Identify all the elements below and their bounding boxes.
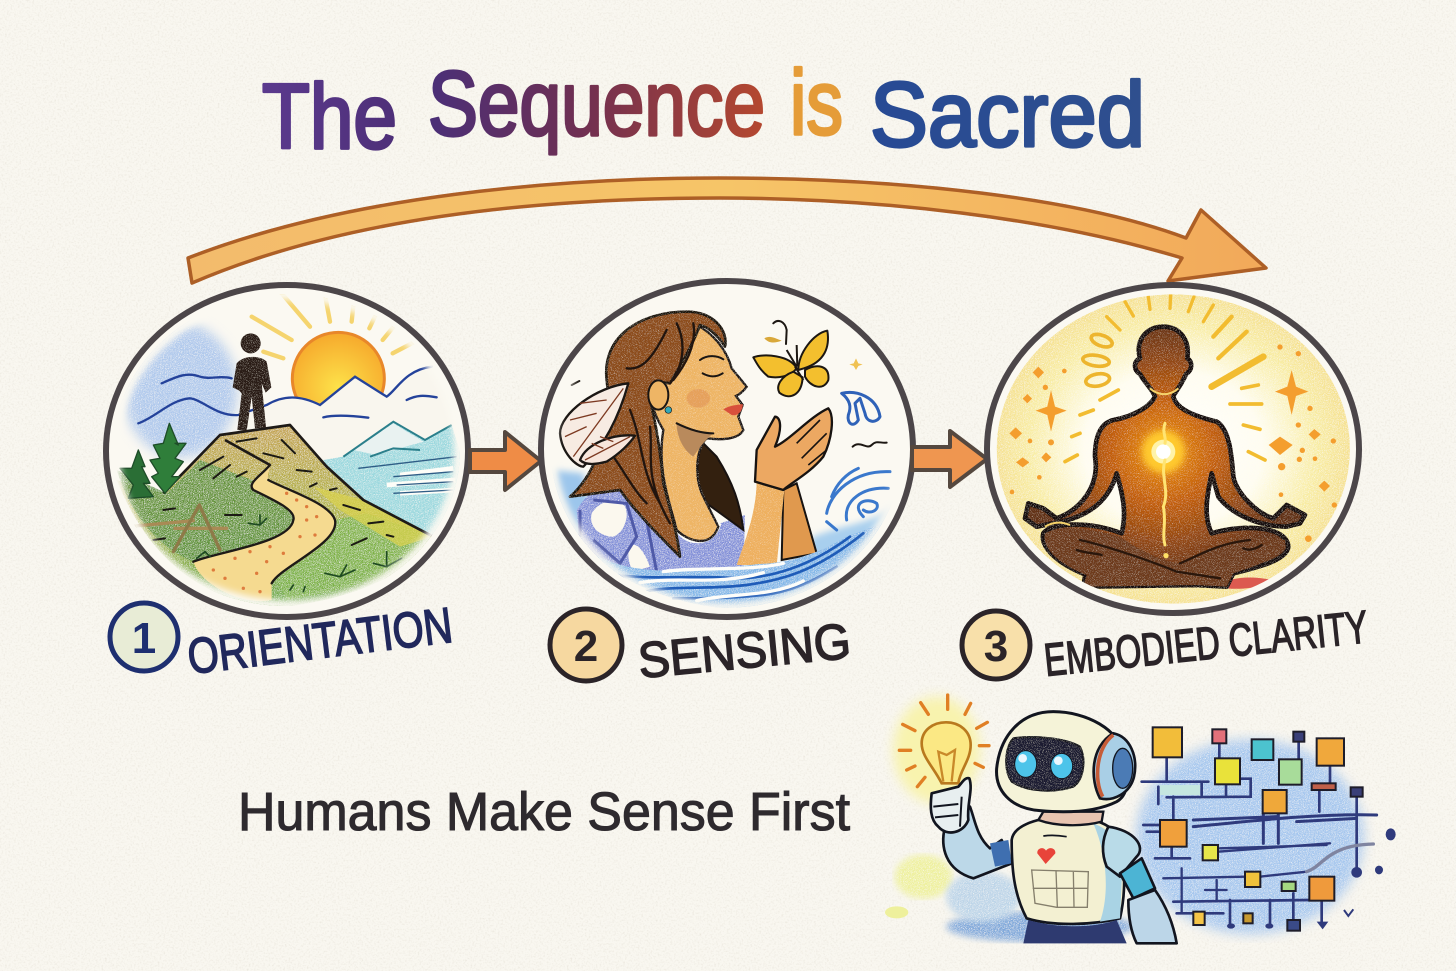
- hill: [117, 425, 433, 607]
- musical note: [842, 393, 880, 424]
- red mat shadow: [1227, 577, 1280, 589]
- title: is: [790, 52, 843, 154]
- back hair: [691, 443, 743, 530]
- badge 3: [962, 611, 1030, 679]
- neck and face: [651, 325, 747, 541]
- scene: mountain and sun: [113, 293, 463, 607]
- water behind: [552, 466, 588, 541]
- scene: meditating figure: [997, 293, 1350, 604]
- arrow: sequence overarching: [188, 178, 1266, 283]
- label: step 1 orientation: [110, 597, 455, 685]
- robot head: [997, 712, 1135, 812]
- cloud mask: [296, 378, 383, 426]
- light bulb: [899, 695, 989, 787]
- hill outline: [163, 425, 433, 537]
- neck line: [1150, 388, 1178, 394]
- panel: orientation illustration: [106, 285, 468, 617]
- trees: [120, 423, 186, 498]
- fence: [135, 505, 227, 552]
- panel: sensing illustration: [541, 281, 913, 617]
- arms: [782, 483, 817, 560]
- soft edge: [552, 316, 892, 608]
- arrow: step 2 to 3: [912, 431, 987, 487]
- scene: woman with butterfly in water: [550, 289, 903, 609]
- badge 1: 1: [132, 614, 156, 663]
- neck shade: [677, 423, 713, 457]
- hill marks: [153, 438, 393, 545]
- face details: [677, 356, 723, 433]
- butterfly: [753, 331, 828, 396]
- distant mountains and lake: [323, 422, 462, 537]
- robot arm raised: [943, 807, 1012, 878]
- front hair: [570, 312, 725, 557]
- panel: embodied clarity illustration: [987, 285, 1359, 613]
- network lines: [1142, 742, 1377, 925]
- title: The: [262, 66, 397, 168]
- seated body: [1025, 327, 1305, 587]
- accents: [572, 321, 887, 447]
- rings left: [1082, 332, 1114, 388]
- orientation text: ORIENTATION: [185, 597, 455, 685]
- sun: [290, 330, 386, 404]
- washes: [885, 697, 1363, 942]
- badge 3: 3: [984, 622, 1008, 671]
- network dots: [1227, 828, 1396, 929]
- crossed legs: [1045, 529, 1285, 587]
- hands: [755, 408, 832, 490]
- standing figure: [233, 333, 271, 431]
- arrow: step 1 to 2: [470, 432, 541, 490]
- water: [597, 524, 882, 608]
- illustration: robot with light bulb and network: [885, 695, 1396, 943]
- sparkles: [1009, 344, 1337, 542]
- soft edge: [113, 294, 460, 606]
- title: [262, 52, 1145, 168]
- sky wash: [123, 323, 237, 457]
- ear: [1094, 733, 1135, 799]
- sensing text: SENSING: [636, 613, 853, 689]
- title: Sacred: [870, 64, 1145, 166]
- circle outline 3: [987, 285, 1359, 613]
- shirt: [576, 492, 745, 572]
- circle outline 1: [106, 285, 468, 617]
- badge 2: [550, 609, 622, 681]
- clouds: [138, 367, 437, 423]
- hair strands: [613, 323, 694, 523]
- trail: [193, 465, 335, 601]
- badge 1: [110, 603, 178, 671]
- label: step 2 sensing: [550, 609, 853, 689]
- rays right: [1065, 293, 1265, 462]
- sun rays: [252, 293, 415, 358]
- label: step 3 embodied clarity: [962, 600, 1370, 686]
- robot torso: [1012, 817, 1124, 924]
- grass tufts: [197, 515, 402, 592]
- right arm: [1103, 827, 1177, 943]
- tagline: Humans Make Sense First: [238, 782, 850, 842]
- robot hips: [1023, 920, 1127, 943]
- ear and earring: [648, 380, 668, 410]
- robot neck: [1038, 812, 1103, 825]
- leaves: [560, 383, 635, 467]
- badge 2: 2: [574, 622, 598, 671]
- circle outline 2: [541, 281, 913, 617]
- glow wash: [997, 294, 1350, 604]
- robot hand: [931, 778, 971, 832]
- network nodes: [1153, 727, 1363, 931]
- chest panel and heart: [1032, 835, 1088, 907]
- eyes: [1015, 751, 1037, 777]
- heart glow: [1142, 430, 1185, 473]
- title: Sequence: [428, 53, 765, 155]
- visor: [1006, 737, 1083, 791]
- swirl: [827, 468, 890, 530]
